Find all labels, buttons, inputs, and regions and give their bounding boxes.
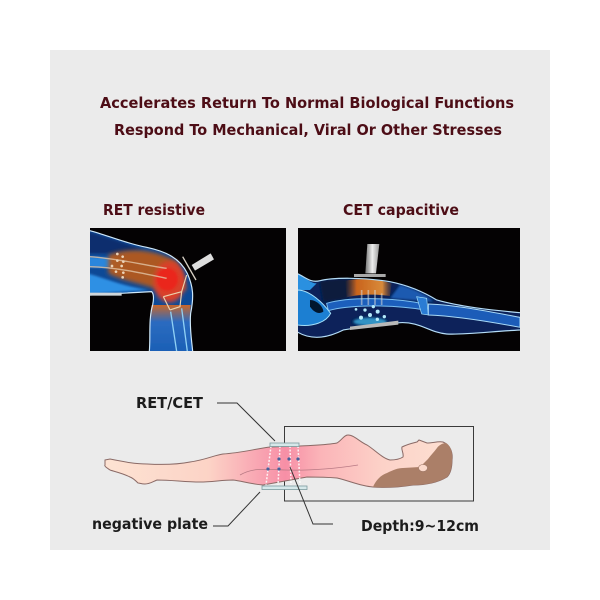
title: Respond To Mechanical, Viral Or Other Stresses	[114, 121, 502, 139]
heading: CET capacitive: CET capacitive	[343, 201, 459, 219]
ear	[418, 464, 428, 472]
heat glow	[345, 279, 392, 297]
body silhouette	[105, 435, 452, 487]
heat glow	[108, 250, 187, 290]
background panel	[50, 50, 550, 550]
torso and leg shape	[297, 273, 520, 337]
box frame	[284, 426, 474, 501]
probe	[192, 253, 214, 271]
treatment beams	[266, 446, 300, 485]
panel: knee illustration	[87, 228, 286, 357]
electrode marks	[111, 253, 125, 279]
callout: RET/CET: RET/CET	[136, 394, 204, 412]
lower plate	[350, 321, 398, 330]
callout: negative plate: negative plate	[92, 515, 208, 533]
limb outline	[297, 273, 520, 337]
body diagram	[105, 426, 474, 501]
callout: negative plate	[92, 492, 260, 533]
energy dots	[353, 318, 387, 326]
limb outline	[90, 231, 193, 351]
bottom plate	[262, 486, 307, 490]
probe	[365, 244, 379, 273]
bones	[90, 257, 167, 278]
callout: depth: Depth:9~12cm	[361, 517, 479, 535]
panel: capacitive illustration	[297, 228, 520, 351]
hair	[373, 443, 452, 487]
electrode dots	[266, 457, 300, 471]
internal line	[240, 465, 358, 475]
callout: RET/CET	[136, 394, 275, 441]
bones	[327, 299, 425, 311]
heading: RET resistive: RET resistive	[103, 201, 205, 219]
title	[100, 94, 514, 139]
knee leg shape	[90, 231, 192, 314]
callout: depth	[290, 467, 479, 535]
title: Accelerates Return To Normal Biological Functions	[100, 94, 514, 112]
top plate	[270, 443, 299, 446]
